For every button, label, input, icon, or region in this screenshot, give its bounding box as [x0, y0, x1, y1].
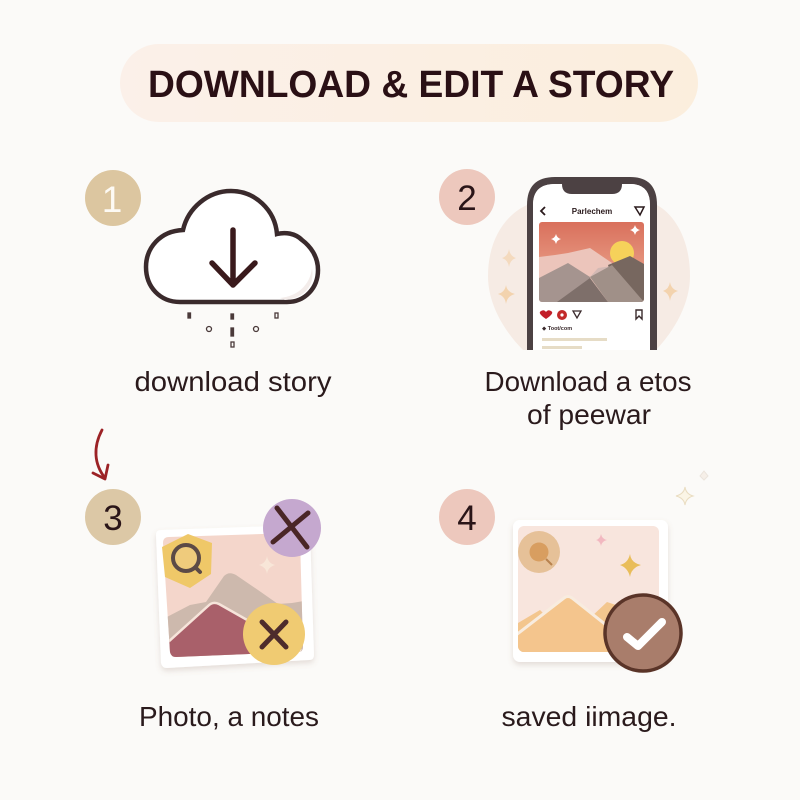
icon: cloud download	[146, 191, 318, 347]
step 3 badge	[85, 489, 141, 545]
step 2 label second line: of peewar	[527, 399, 651, 430]
step 4 badge: 4	[457, 499, 477, 538]
arrow: red curved	[93, 430, 108, 479]
sparkles	[620, 554, 641, 577]
backdrop circle	[488, 205, 690, 350]
step 4 label: saved iimage.	[502, 701, 676, 732]
decorative sparkles	[676, 471, 708, 505]
title: DOWNLOAD & EDIT A STORY	[148, 64, 674, 106]
step 3 label: Photo, a notes	[139, 701, 319, 732]
icon: saved image with check	[513, 520, 681, 671]
badge: yellow X	[243, 603, 305, 665]
phone header	[541, 207, 545, 215]
badge: purple X	[263, 499, 321, 557]
magnifier badge	[518, 531, 560, 573]
step 3 badge: 3	[103, 499, 123, 538]
step 1 badge	[85, 170, 141, 226]
icon: phone with photo post: Parlechem	[572, 207, 612, 216]
photo	[539, 222, 644, 302]
icon: phone with photo post: ◆ Toot/com	[542, 326, 572, 332]
step 4 badge	[439, 489, 495, 545]
badge: magnifier	[162, 534, 212, 588]
phone body	[527, 177, 657, 350]
icon: phone with photo post	[488, 177, 690, 350]
check badge	[605, 595, 681, 671]
step 2 badge	[439, 169, 495, 225]
post actions	[540, 310, 552, 319]
step 1 badge: 1	[102, 179, 122, 220]
step 2 badge: 2	[457, 179, 477, 218]
sparkles	[498, 249, 678, 304]
step 2 label: Download a etos	[484, 366, 692, 397]
step 1 label: download story	[134, 366, 332, 397]
title	[120, 44, 698, 122]
icon: photo with edit badges	[156, 499, 321, 668]
